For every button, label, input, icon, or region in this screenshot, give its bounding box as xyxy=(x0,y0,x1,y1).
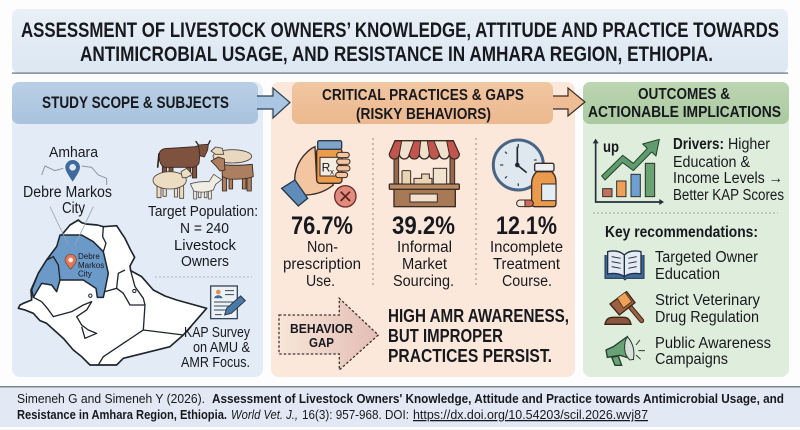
statistic: non-prescription use: Non- xyxy=(307,239,338,256)
label: Debre Markos City xyxy=(23,184,112,217)
icon: megaphone xyxy=(606,337,645,365)
icon: hand holding Rx bottle: x xyxy=(330,168,334,177)
text: KAP survey focus: on AMU & xyxy=(193,339,250,356)
recommendation: targeted owner education: Targeted Owner xyxy=(655,249,758,266)
icon: hand holding Rx bottle xyxy=(282,141,356,207)
label: map city name xyxy=(78,252,104,278)
text: target population: Owners xyxy=(181,253,229,270)
recommendation: strict veterinary drug regulation: Strict Veterinary xyxy=(655,292,760,309)
callout: behavior gap statement xyxy=(388,306,569,366)
text: drivers: Education & xyxy=(673,154,751,171)
citation text: World Vet. J., xyxy=(231,408,298,422)
icon: livestock group xyxy=(153,140,253,199)
recommendation: public awareness campaigns xyxy=(655,335,771,368)
recommendation: targeted owner education: Education xyxy=(655,266,720,283)
text: drivers xyxy=(673,136,784,204)
arrow: scope to practices xyxy=(257,88,290,118)
icon: informal market stall xyxy=(389,141,459,207)
arrow: behavior gap: BEHAVIOR xyxy=(290,321,354,336)
recommendation: targeted owner education xyxy=(655,249,758,283)
recommendation: public awareness campaigns: Campaigns xyxy=(655,351,728,368)
label: map city name: City xyxy=(78,270,92,278)
statistic: informal market sourcing: Market xyxy=(402,256,448,273)
statistic: incomplete treatment course: 12.1% xyxy=(496,212,557,240)
citation bar xyxy=(0,386,800,427)
recommendation: strict veterinary drug regulation xyxy=(655,292,760,326)
citation text: Resistance in Amhara Region, Ethiopia. xyxy=(17,408,227,422)
citation text: https://dx.doi.org/10.54203/scil.2026.wvj87 xyxy=(413,408,648,422)
arrow: practices to outcomes xyxy=(553,88,585,116)
title xyxy=(21,19,779,66)
icon: Amhara location pin with border line xyxy=(42,160,107,185)
text: target population: Target Population: xyxy=(148,203,258,220)
callout: behavior gap statement: PRACTICES PERSIST. xyxy=(388,346,552,366)
text: KAP survey focus: AMR Focus. xyxy=(181,354,250,371)
text: drivers: Income Levels → xyxy=(673,170,783,187)
label: Debre Markos City: Debre Markos xyxy=(23,184,112,201)
label: chart up: up xyxy=(603,139,619,156)
icon: survey form and pen xyxy=(211,286,245,319)
label: Amhara: Amhara xyxy=(49,144,99,161)
text: target population: N = 240 xyxy=(180,220,229,237)
text: drivers: Drivers: xyxy=(673,136,724,153)
heading: study scope: STUDY SCOPE & SUBJECTS xyxy=(42,94,229,112)
statistic: incomplete treatment course: Incomplete xyxy=(490,239,563,256)
text: drivers: Higher xyxy=(728,136,770,153)
recommendation: public awareness campaigns: Public Awareness xyxy=(655,335,771,352)
heading: critical practices: CRITICAL PRACTICES & GAPS xyxy=(322,87,524,104)
heading: outcomes xyxy=(588,86,781,121)
arrow: behavior gap xyxy=(279,298,378,370)
icon: open book xyxy=(605,251,644,280)
statistic: incomplete treatment course: Treatment xyxy=(493,256,561,273)
statistic: informal market sourcing: Informal xyxy=(397,239,452,256)
callout: behavior gap statement: BUT IMPROPER xyxy=(388,326,503,346)
heading: critical practices: (RISKY BEHAVIORS) xyxy=(356,106,491,123)
text: target population xyxy=(148,203,258,270)
statistic: informal market sourcing: Sourcing. xyxy=(393,273,454,290)
label: map city name: Markos xyxy=(78,261,104,270)
callout: behavior gap statement: HIGH AMR AWARENESS, xyxy=(388,306,569,326)
label: map city name: Debre xyxy=(78,252,100,261)
recommendation: strict veterinary drug regulation: Drug Regulation xyxy=(655,309,759,326)
statistic: non-prescription use xyxy=(283,212,361,290)
icon: hand holding Rx bottle: R xyxy=(322,161,331,175)
statistic: informal market sourcing xyxy=(392,212,455,290)
statistic: non-prescription use: prescription xyxy=(283,256,361,273)
text: target population: Livestock xyxy=(174,237,236,254)
heading: outcomes: OUTCOMES & xyxy=(638,86,730,103)
text: KAP survey focus: KAP Survey xyxy=(184,324,250,341)
panel: outcomes and implications xyxy=(583,82,789,377)
map: Ethiopia regions with Amhara highlighted xyxy=(18,207,207,365)
text: drivers: Better KAP Scores xyxy=(673,187,784,204)
icon: clock and medicine bottle xyxy=(493,140,556,207)
statistic: incomplete treatment course: Course. xyxy=(502,273,552,290)
citation text: Simeneh G and Simeneh Y (2026). xyxy=(17,392,205,406)
title banner xyxy=(12,9,788,74)
statistic: non-prescription use: Use. xyxy=(306,273,335,290)
statistic: non-prescription use: 76.7% xyxy=(291,212,353,240)
text: KAP survey focus xyxy=(181,324,250,371)
citation text xyxy=(17,392,784,422)
citation text: 16(3): 957-968. DOI: xyxy=(302,408,409,422)
statistic: incomplete treatment course xyxy=(490,212,563,290)
subheading: key recommendations: Key recommendations: xyxy=(605,224,758,241)
icon: gavel xyxy=(605,292,642,324)
panel: study scope and subjects xyxy=(12,82,263,377)
panel: critical practices and gaps xyxy=(271,82,575,377)
heading: critical practices xyxy=(322,87,524,123)
label: Debre Markos City: City xyxy=(62,200,85,217)
statistic: informal market sourcing: 39.2% xyxy=(392,212,455,240)
chart icon: rising bars and arrow xyxy=(593,139,664,205)
arrow: behavior gap: GAP xyxy=(309,335,334,350)
